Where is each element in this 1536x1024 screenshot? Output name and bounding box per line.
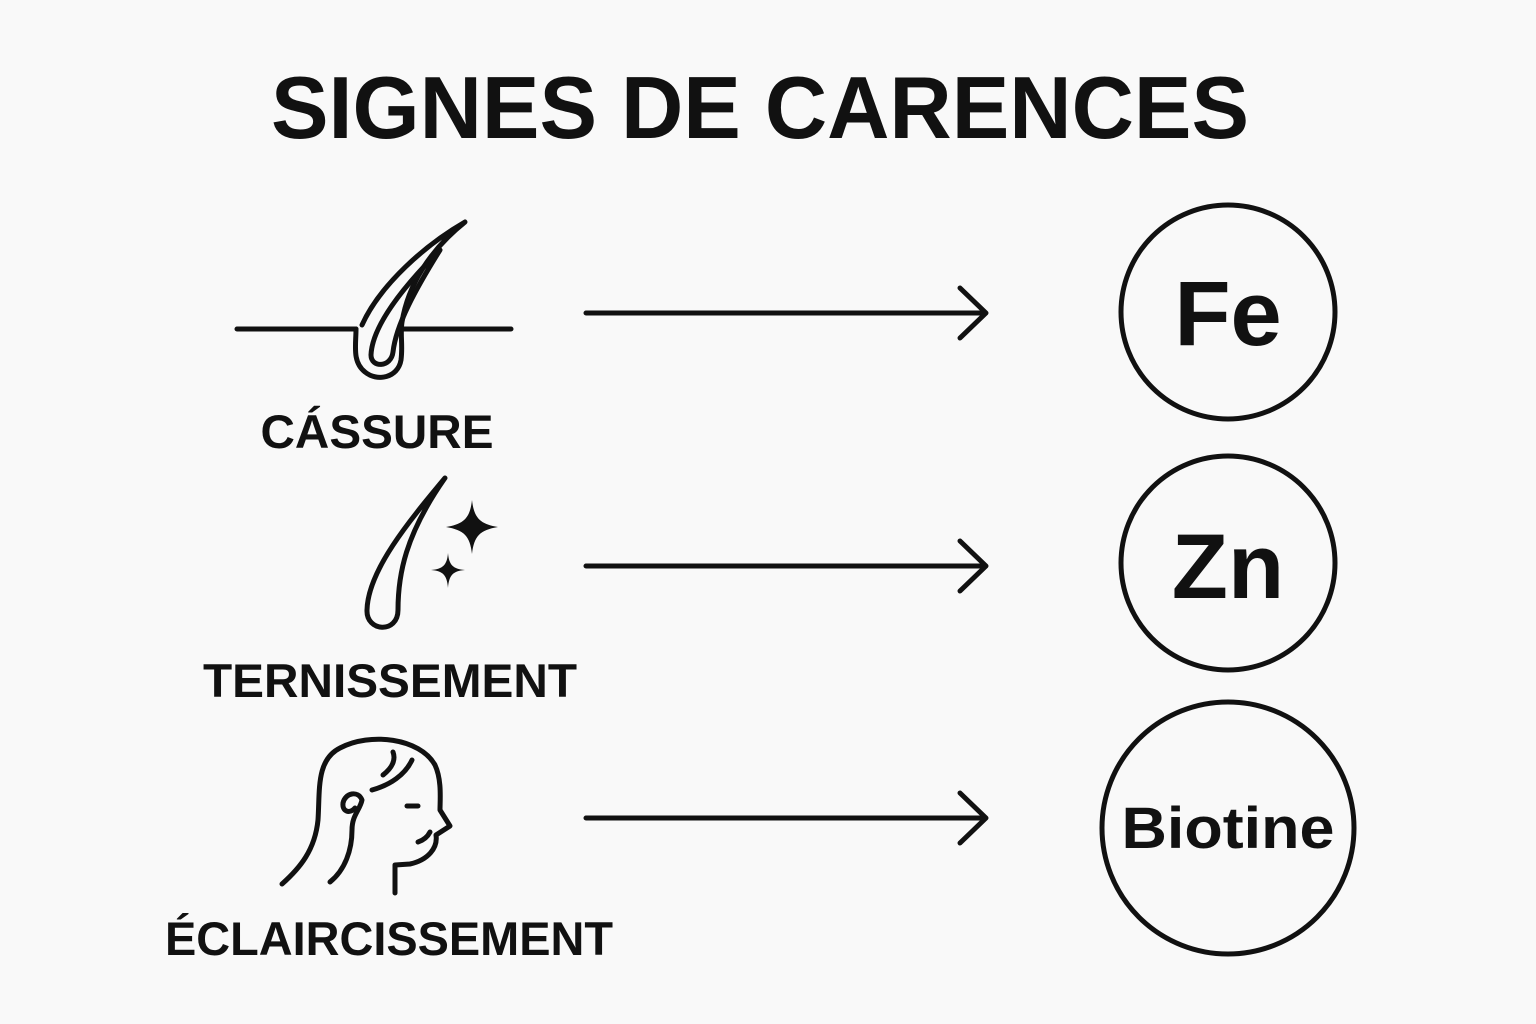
circle: Biotine: Biotine <box>1122 796 1334 861</box>
label: cassure: CÁSSURE <box>260 405 494 458</box>
label: ternissement: TERNISSEMENT <box>203 654 577 707</box>
icon: hair follicle <box>237 222 511 377</box>
arrow 1 <box>586 288 986 338</box>
row 1: cassure <box>237 222 511 458</box>
row 3: eclaircissement <box>165 739 613 965</box>
label: eclaircissement: ÉCLAIRCISSEMENT <box>165 912 613 965</box>
title: SIGNES DE CARENCES <box>271 58 1249 157</box>
icon: dull hair with sparkles <box>367 478 498 627</box>
circle: Zn <box>1121 456 1335 670</box>
arrow 2 <box>586 541 986 591</box>
circle: Fe <box>1121 205 1335 419</box>
icon: head profile <box>282 739 450 893</box>
arrow 3 <box>586 793 986 843</box>
row 2: ternissement <box>203 478 577 707</box>
circle: Zn: Zn <box>1172 516 1284 618</box>
circle: Fe: Fe <box>1174 263 1282 365</box>
circle: Biotine <box>1102 702 1354 954</box>
